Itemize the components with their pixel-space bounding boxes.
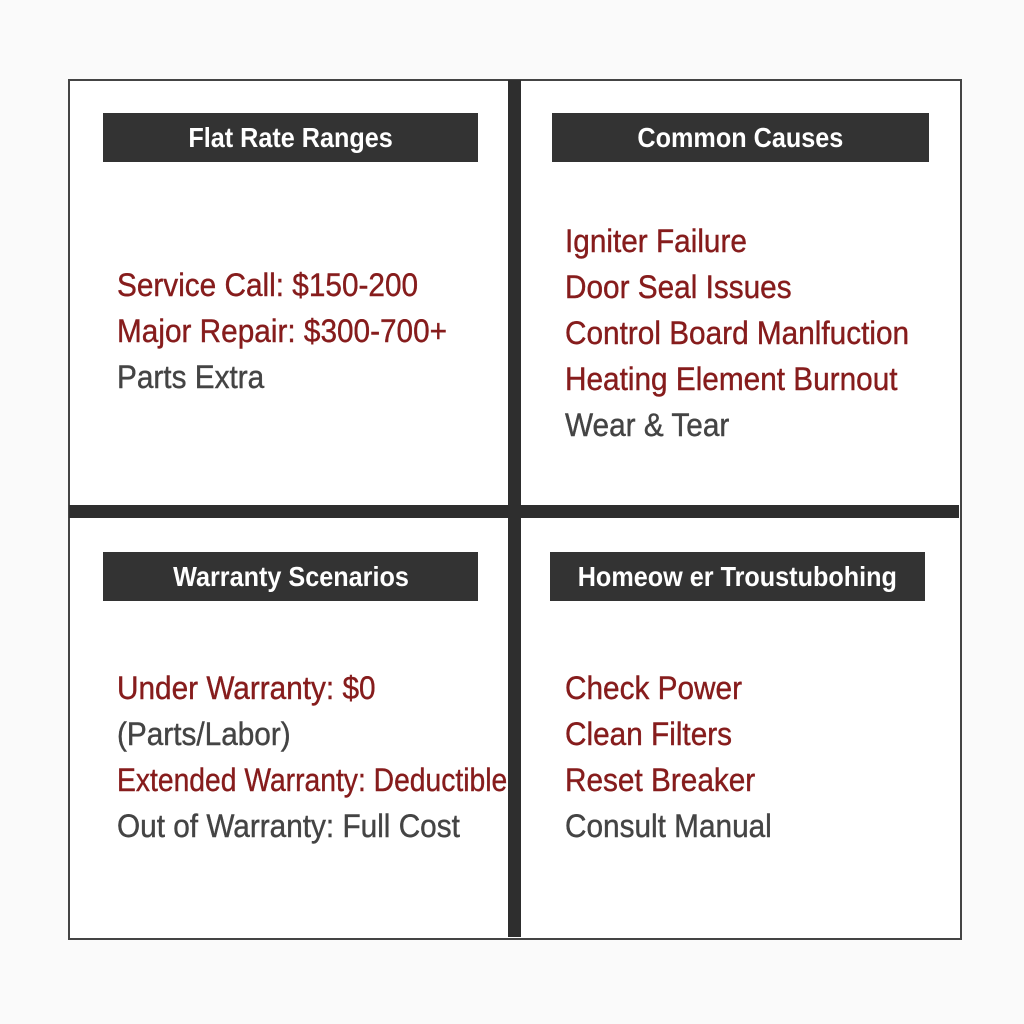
panel: flat rate ranges text: Service Call: $150-200 <box>117 267 418 303</box>
outer frame <box>68 79 962 940</box>
panel: common causes heading: Common Causes <box>638 122 843 153</box>
panel: common causes text: Door Seal Issues <box>565 269 792 305</box>
panel: common causes text <box>564 223 909 443</box>
panel: warranty heading <box>103 552 478 601</box>
panel: warranty text: Extended Warranty: Deductible <box>117 762 507 798</box>
panel: common causes text: Control Board Manlfuction <box>565 315 909 351</box>
panel: common causes text: Wear & Tear <box>565 407 729 443</box>
panel: warranty text: (Parts/Labor) <box>117 716 291 752</box>
panel: flat rate ranges text <box>117 267 447 395</box>
panel: warranty text: Under Warranty: $0 <box>117 670 376 706</box>
panel: flat rate ranges heading <box>103 113 478 162</box>
panel: flat rate ranges text: Major Repair: $300-700+ <box>117 313 447 349</box>
panel: common causes text: Igniter Failure <box>565 223 747 259</box>
panel: warranty heading: Warranty Scenarios <box>173 561 408 592</box>
panel: common causes text: Heating Element Burnout <box>565 361 898 397</box>
panel: flat rate ranges text: Parts Extra <box>117 359 264 395</box>
panel: warranty text: Out of Warranty: Full Cost <box>117 808 460 844</box>
panel: troubleshooting text <box>565 670 772 844</box>
panel: troubleshooting heading <box>550 552 925 601</box>
panel: troubleshooting heading: Homeow er Troustubohing <box>578 561 897 592</box>
panel: flat rate ranges heading: Flat Rate Ranges <box>188 122 393 153</box>
panel: troubleshooting text: Check Power <box>565 670 742 706</box>
panel: troubleshooting text: Reset Breaker <box>565 762 755 798</box>
panel: troubleshooting text: Consult Manual <box>565 808 772 844</box>
panel: common causes heading <box>552 113 929 162</box>
panel: troubleshooting text: Clean Filters <box>565 716 732 752</box>
panel: warranty text <box>117 670 507 844</box>
